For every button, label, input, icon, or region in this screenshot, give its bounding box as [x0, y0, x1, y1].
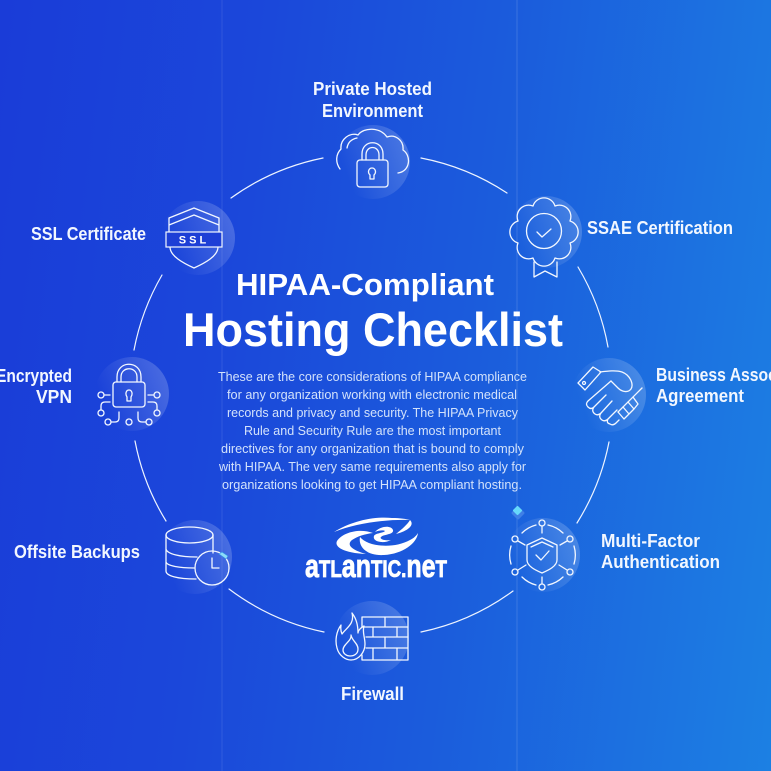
intro paragraph: These are the core considerations of HIPAA compliance [218, 369, 527, 384]
icon: database with clock [158, 520, 232, 594]
icon: padlock with circuit [95, 357, 169, 431]
icon: cloud with padlock [336, 125, 410, 199]
label: multi-factor authentication: Multi-Factor [601, 531, 700, 551]
item: multi-factor authentication [506, 518, 720, 592]
icon: brick wall with flame [335, 601, 409, 675]
label: firewall: Firewall [341, 684, 404, 704]
ring of connecting arcs [134, 158, 609, 632]
title: Hosting Checklist [183, 303, 563, 356]
intro paragraph: with HIPAA. The very same requirements also apply for [218, 459, 527, 474]
label: offsite backups: Offsite Backups [14, 542, 140, 562]
item: private hosted environment [313, 79, 432, 199]
title: HIPAA-Compliant [236, 267, 494, 302]
item: offsite backups [14, 520, 232, 594]
item: encrypted VPN [0, 357, 169, 431]
atlantic.net logo: aTLanTIC.neT [305, 548, 447, 584]
label: business associate agreement: Agreement [656, 386, 744, 406]
item: SSL certificate [31, 201, 235, 275]
item: firewall [335, 601, 409, 704]
intro paragraph: records and privacy and security. The HIPAA Privacy [227, 405, 518, 420]
label: private hosted environment: Environment [322, 101, 423, 121]
label: multi-factor authentication [601, 531, 720, 572]
label: encrypted VPN: VPN [36, 387, 72, 407]
label: SSL certificate: SSL Certificate [31, 224, 146, 244]
intro paragraph: directives for any organization that is bound to comply [221, 441, 524, 456]
item: business associate agreement [572, 358, 771, 432]
label: SSAE certification: SSAE Certification [587, 218, 733, 238]
label: encrypted VPN [0, 366, 72, 407]
icon: shield with connected nodes [506, 518, 580, 592]
label: private hosted environment [313, 79, 432, 121]
icon: SSL shield [161, 201, 235, 275]
label: business associate agreement [656, 365, 771, 406]
icon: handshake [572, 358, 646, 432]
label: private hosted environment: Private Hosted [313, 79, 432, 99]
icon: SSL shield: SSL [179, 234, 209, 246]
decorative cyan diamond marker [511, 506, 525, 520]
item: SSAE certification [510, 196, 733, 277]
intro paragraph: organizations looking to get HIPAA compliant hosting. [222, 477, 522, 492]
icon: certification seal [510, 196, 582, 277]
label: multi-factor authentication: Authentication [601, 552, 720, 572]
intro paragraph [218, 369, 527, 492]
atlantic.net logo [305, 518, 447, 584]
intro paragraph: for any organization working with electronic medical [227, 387, 517, 402]
intro paragraph: Rule and Security Rule are the most important [244, 423, 501, 438]
title [183, 267, 563, 356]
